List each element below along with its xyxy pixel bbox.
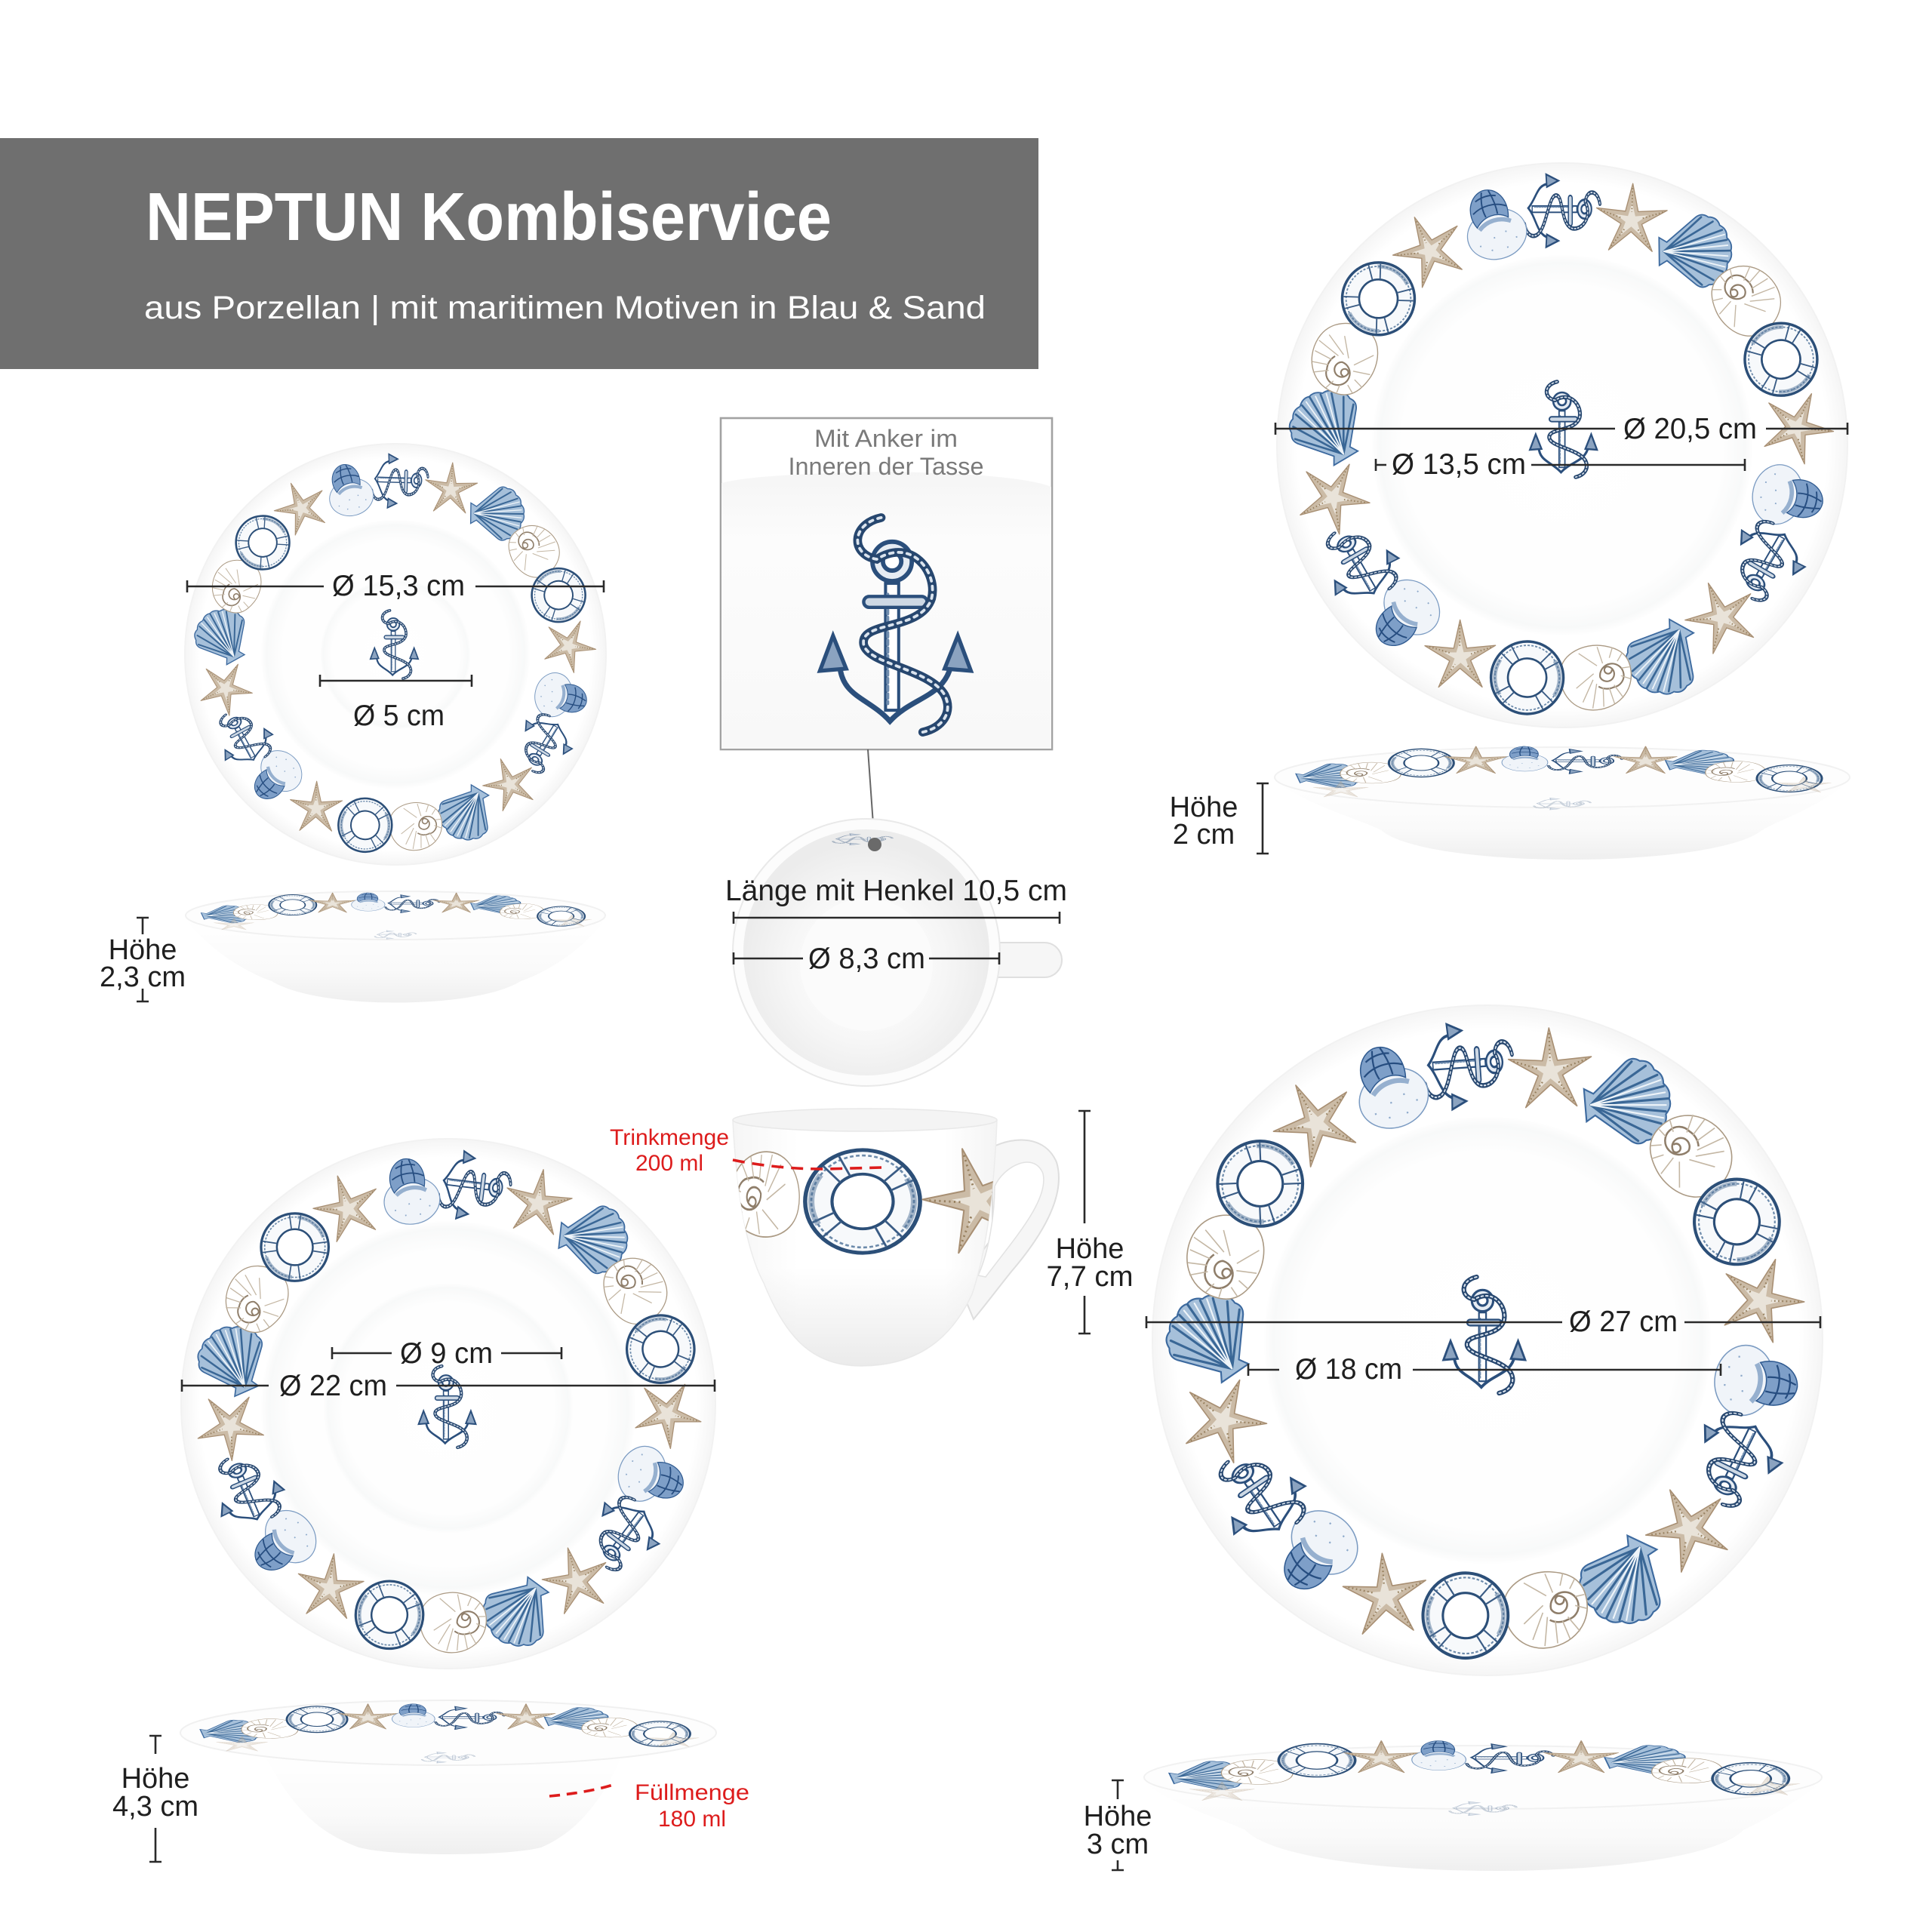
connector from inset to cup xyxy=(868,749,875,845)
handle opening xyxy=(978,1162,1044,1277)
dimension: dessert plate height: Höhe xyxy=(1170,792,1238,823)
dimension: deep plate height: 4,3 cm xyxy=(112,1791,198,1823)
inset anchor xyxy=(820,518,971,732)
saucer underside xyxy=(186,919,605,1002)
deep plate rim motifs xyxy=(61,1100,735,1780)
dessert plate body xyxy=(1277,163,1847,728)
dimension: cup diameter: Ø 8,3 cm xyxy=(808,943,925,975)
dimension: saucer diameter xyxy=(187,570,604,602)
dimension: dessert plate well xyxy=(1376,448,1745,481)
inset cup interior xyxy=(721,472,1051,749)
dimension: saucer well diameter xyxy=(320,675,472,732)
inset: anchor detail xyxy=(721,418,1052,749)
dessert plate centre anchor xyxy=(1530,382,1597,477)
subtitle: aus Porzellan | mit maritimen Motiven in Blau & Sand xyxy=(144,290,986,326)
plate: saucer top view xyxy=(114,438,606,935)
cup body xyxy=(733,1121,997,1366)
cup top view xyxy=(725,819,1067,1086)
dimension: cup length xyxy=(725,875,1067,924)
inset caption: Mit Anker im xyxy=(814,425,958,452)
dimension: dessert plate height: 2 cm xyxy=(1173,819,1235,851)
dimension: deep plate diameter xyxy=(182,1370,715,1402)
saucer side motifs xyxy=(198,893,592,939)
deep plate bowl xyxy=(264,1755,623,1854)
dinner plate underside xyxy=(1144,1783,1822,1871)
dimension: saucer well diameter: Ø 5 cm xyxy=(353,700,445,732)
cup motifs xyxy=(737,1148,993,1255)
dimension: dessert plate well: Ø 13,5 cm xyxy=(1392,448,1526,481)
label: drinking volume: 200 ml xyxy=(635,1151,703,1176)
cup handle xyxy=(958,1140,1059,1319)
dimension: cup height xyxy=(1046,1111,1134,1334)
deep plate base xyxy=(323,1283,574,1534)
plate: dinner plate side view xyxy=(1084,1741,1822,1871)
dimension: saucer height xyxy=(100,918,186,1001)
label: bowl volume: 180 ml xyxy=(658,1807,726,1832)
cup rim xyxy=(733,1109,997,1131)
dimension: deep plate well xyxy=(332,1337,561,1370)
cup outer rim xyxy=(733,819,1000,1086)
cup side view xyxy=(610,1109,1134,1366)
dinner plate rim xyxy=(1144,1746,1822,1809)
deep plate rim xyxy=(180,1700,716,1765)
fill line: drinking volume xyxy=(733,1160,881,1169)
dessert plate rim xyxy=(1275,747,1850,808)
fill line: bowl volume xyxy=(549,1785,613,1796)
plate: deep plate side view xyxy=(112,1700,749,1862)
dinner plate centre anchor xyxy=(1444,1277,1525,1393)
plate: deep plate top view xyxy=(61,1100,735,1780)
label: drinking volume xyxy=(610,1125,729,1176)
saucer rim xyxy=(186,891,605,940)
banner background xyxy=(0,138,1038,369)
cup starfish xyxy=(921,1148,993,1254)
cup lifebuoy xyxy=(803,1148,922,1255)
dinner plate well xyxy=(1264,1117,1711,1564)
deep plate body xyxy=(181,1139,715,1669)
dimension: saucer height: Höhe xyxy=(109,934,177,966)
plate: saucer side view xyxy=(100,891,605,1002)
dessert plate underside xyxy=(1275,781,1849,860)
saucer inner ring xyxy=(320,579,471,730)
inset caption: Inneren der Tasse xyxy=(788,453,984,480)
cup base xyxy=(800,898,933,1031)
saucer body xyxy=(185,444,606,865)
plate: dessert plate top view xyxy=(1190,163,1847,819)
title: NEPTUN Kombiservice xyxy=(146,180,832,255)
banner xyxy=(0,138,1038,369)
dimension: deep plate height xyxy=(112,1736,198,1862)
deep plate side motifs xyxy=(197,1704,699,1763)
deep plate well xyxy=(261,1221,635,1595)
dimension: dinner plate well: Ø 18 cm xyxy=(1295,1353,1402,1386)
dinner plate side motifs xyxy=(1165,1741,1800,1816)
dinner plate rim motifs xyxy=(1029,987,1840,1808)
dessert plate well xyxy=(1372,255,1752,635)
dinner plate body xyxy=(1152,1005,1823,1675)
cup interior xyxy=(743,829,989,1075)
dimension: dinner plate diameter: Ø 27 cm xyxy=(1569,1306,1678,1338)
dimension: dinner plate well xyxy=(1248,1353,1721,1386)
label: drinking volume: Trinkmenge xyxy=(610,1125,729,1150)
cup handle top view xyxy=(981,943,1062,977)
dimension: deep plate well: Ø 9 cm xyxy=(400,1337,493,1370)
dimension: cup height: 7,7 cm xyxy=(1046,1261,1134,1293)
label: bowl volume: Füllmenge xyxy=(635,1780,749,1805)
saucer centre anchor xyxy=(371,611,418,678)
saucer well xyxy=(261,520,530,789)
dimension: cup length: Länge mit Henkel 10,5 cm xyxy=(725,875,1067,907)
dessert plate rim motifs xyxy=(1190,163,1837,819)
dimension: cup height: Höhe xyxy=(1056,1233,1124,1265)
faint anchor in cup xyxy=(833,834,892,845)
dimension: dessert plate diameter: Ø 20,5 cm xyxy=(1623,413,1757,445)
dimension: saucer height: 2,3 cm xyxy=(100,961,186,993)
dimension: dinner plate height: 3 cm xyxy=(1087,1829,1149,1860)
dimension: cup diameter xyxy=(734,943,999,975)
dimension: dinner plate diameter xyxy=(1146,1306,1820,1338)
cup lower shading xyxy=(733,1121,997,1366)
plate: dinner plate top view xyxy=(1029,987,1840,1808)
dimension: dessert plate diameter xyxy=(1275,413,1847,445)
inset frame xyxy=(721,418,1052,749)
dimension: dinner plate height: Höhe xyxy=(1084,1801,1152,1832)
label: bowl volume xyxy=(635,1780,749,1832)
dimension: deep plate diameter: Ø 22 cm xyxy=(279,1370,387,1402)
plate: dessert plate side view xyxy=(1170,746,1850,860)
inset caption xyxy=(788,425,984,480)
dimension: dessert plate height xyxy=(1170,783,1269,854)
cup nautilus xyxy=(731,1152,799,1237)
dimension: deep plate height: Höhe xyxy=(122,1763,189,1795)
deep plate centre anchor xyxy=(419,1366,475,1447)
dimension: dinner plate height xyxy=(1084,1780,1152,1870)
saucer rim motifs xyxy=(114,438,604,935)
connector dot xyxy=(868,838,881,851)
dessert plate side motifs xyxy=(1293,746,1831,810)
dimension: saucer diameter: Ø 15,3 cm xyxy=(332,570,465,602)
